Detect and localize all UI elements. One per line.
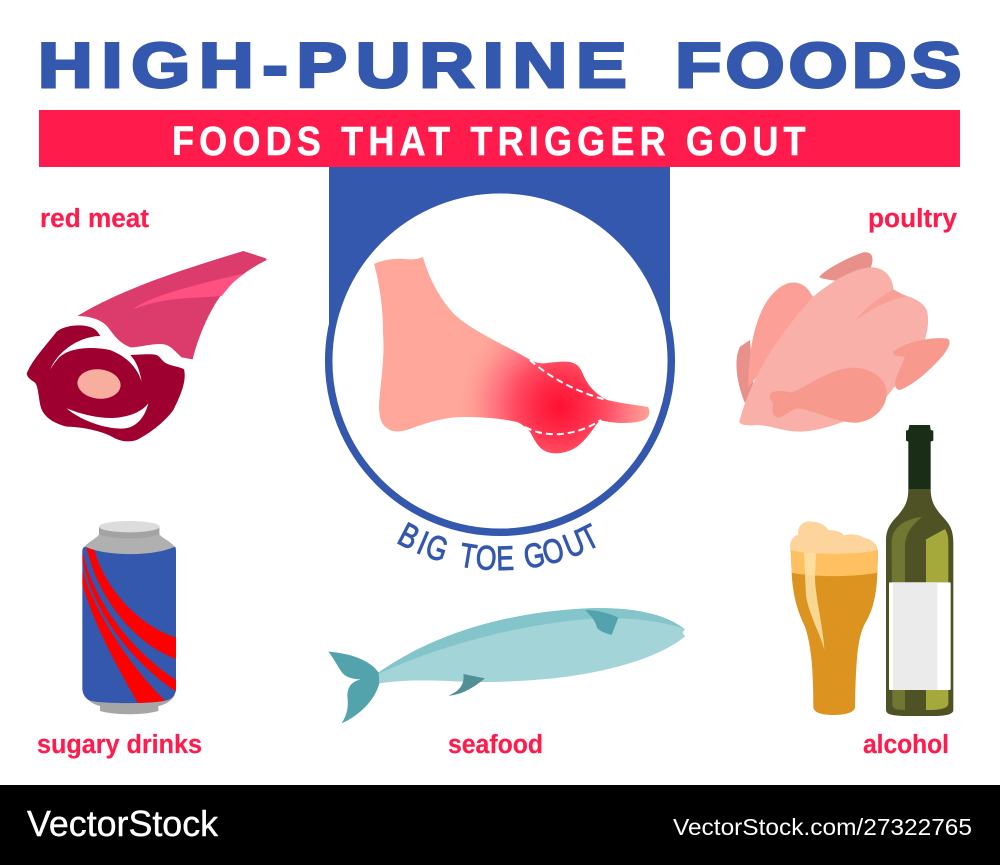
title: FOODS: [675, 30, 966, 101]
footer bar: VectorStock: [27, 803, 219, 844]
panel: big toe gout medallion: [329, 167, 671, 532]
curved caption: big toe gout: [392, 516, 605, 578]
title: HIGH-PURINE: [38, 30, 635, 101]
label: poultry: poultry: [868, 205, 958, 233]
icon: poultry: [736, 252, 950, 432]
circle frame: [329, 190, 671, 532]
curved caption: big toe gout: B: [392, 516, 425, 557]
icon: soda can: [82, 521, 176, 714]
subtitle banner: [39, 110, 960, 167]
curved caption: big toe gout: U: [558, 523, 590, 566]
blue ribbon behind circle: [329, 167, 670, 332]
label: red meat: red meat: [40, 205, 150, 233]
icon: fish: [328, 608, 685, 723]
icon: red meat: [27, 251, 267, 441]
icon: wine bottle: [886, 425, 953, 716]
curved caption: big toe gout: G: [521, 535, 548, 576]
curved caption: big toe gout: O: [475, 539, 498, 578]
curved caption: big toe gout: I: [412, 524, 433, 562]
curved caption: big toe gout: G: [421, 527, 453, 570]
curved caption: big toe gout: T: [457, 536, 479, 576]
footer bar: [0, 785, 1000, 865]
label: seafood: seafood: [448, 731, 543, 759]
icon: beer glass: [790, 521, 878, 715]
curved caption: big toe gout: E: [496, 540, 515, 578]
curved caption: big toe gout: O: [538, 531, 568, 573]
label: sugary drinks: sugary drinks: [37, 731, 202, 759]
dashed toe joint outline: [525, 360, 607, 434]
footer bar: VectorStock.com/27322765: [673, 814, 972, 840]
curved caption: big toe gout: T: [573, 517, 605, 558]
label: alcohol: alcohol: [863, 731, 949, 759]
subtitle banner: FOODS THAT TRIGGER GOUT: [172, 119, 806, 165]
icon: foot with inflamed toe: [374, 257, 649, 453]
